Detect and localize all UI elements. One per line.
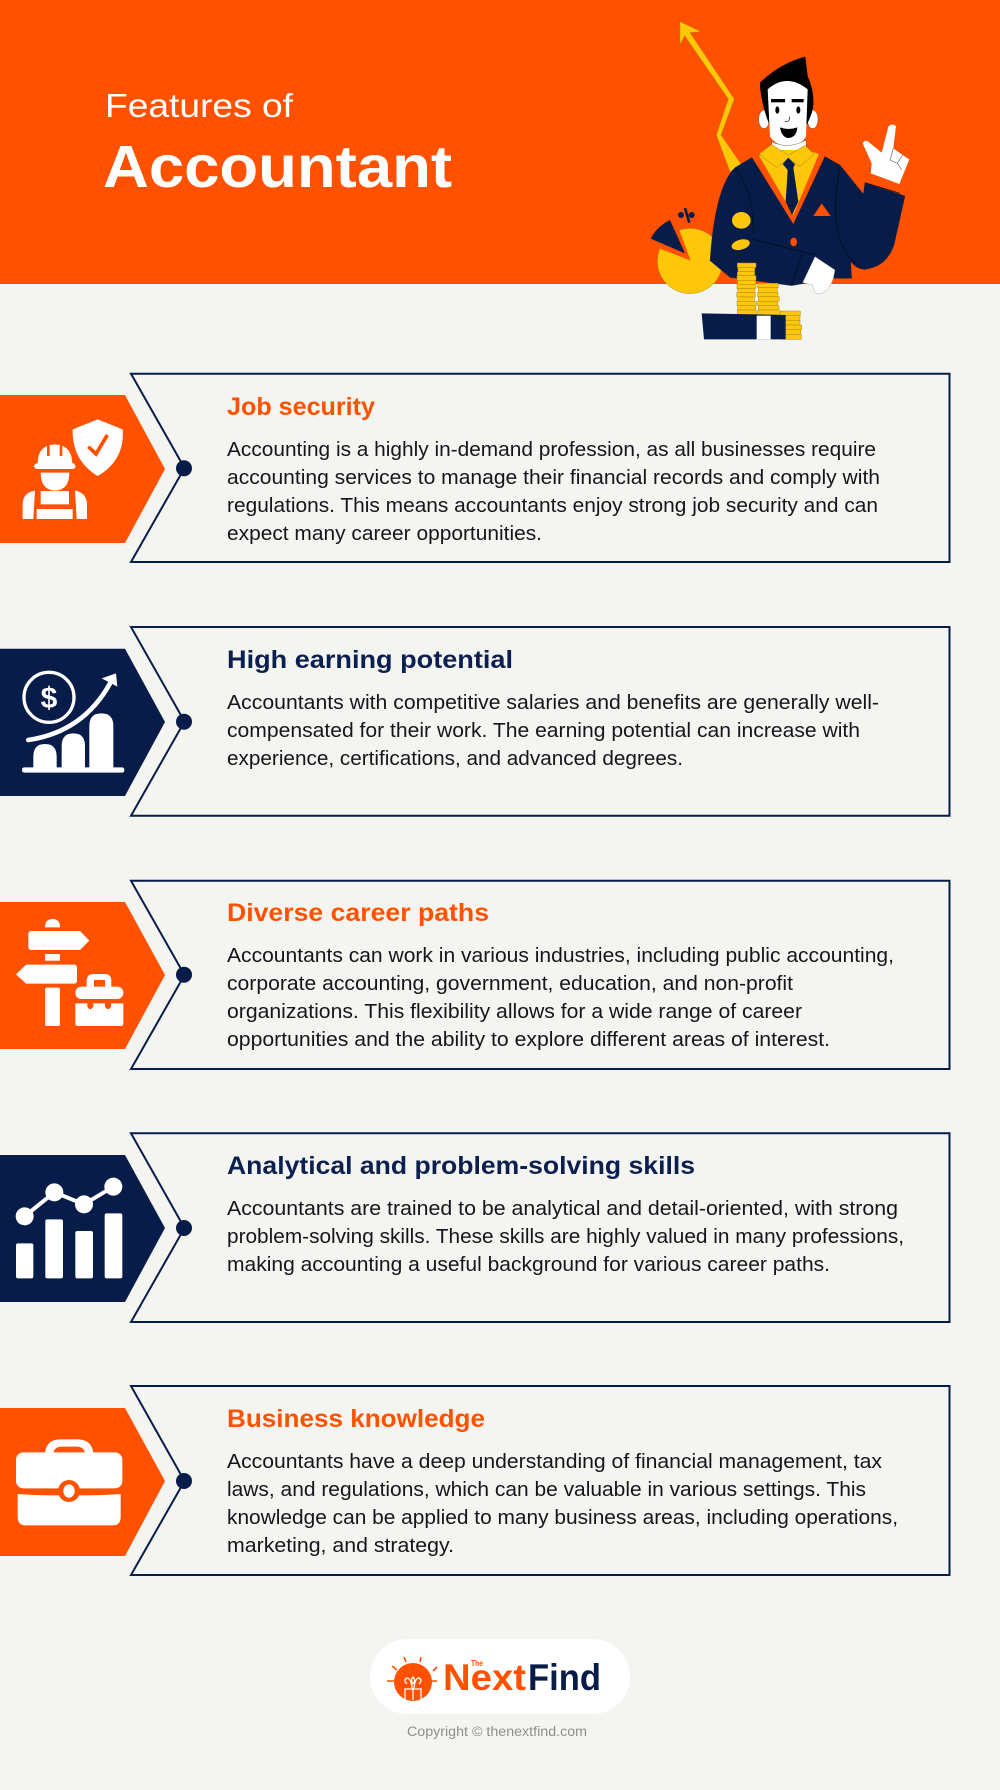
logo: TheNextFind: Next <box>443 1657 526 1698</box>
connector dot <box>176 1473 192 1489</box>
body text: organizations. This flexibility allows for a wide range of career <box>227 1001 802 1023</box>
connector dot <box>176 460 192 476</box>
body text: marketing, and strategy. <box>227 1535 454 1557</box>
body text: experience, certifications, and advanced degrees. <box>227 748 683 770</box>
body text: expect many career opportunities. <box>227 523 542 545</box>
logo: TheNextFind <box>370 1639 630 1714</box>
logo: TheNextFind: The <box>471 1659 483 1668</box>
panel: job security <box>0 374 950 562</box>
heading: Job security <box>227 393 375 421</box>
heading: Business knowledge <box>227 1405 485 1433</box>
title <box>103 87 452 200</box>
body text <box>227 1451 898 1557</box>
title: Accountant <box>103 134 452 200</box>
icon badge: worker and shield <box>0 395 165 543</box>
body text <box>227 1198 904 1276</box>
heading: High earning potential <box>227 646 513 674</box>
connector dot <box>176 714 192 730</box>
panel: high earning potential <box>0 627 950 816</box>
body text: corporate accounting, government, education, and non-profit <box>227 973 793 995</box>
panel: diverse career paths <box>0 881 950 1069</box>
connector dot <box>176 1220 192 1236</box>
icon: coin stacks <box>737 263 802 339</box>
panel: business knowledge <box>0 1386 950 1575</box>
copyright: Copyright © thenextfind.com <box>407 1724 587 1739</box>
body text <box>227 692 879 770</box>
body text: Accounting is a highly in-demand profession, as all businesses require <box>227 439 876 461</box>
panel outline <box>131 881 950 1069</box>
body text: Accountants can work in various industries, including public accounting, <box>227 945 894 967</box>
body text: Accountants with competitive salaries and benefits are generally well- <box>227 692 879 714</box>
icon badge: line and bar chart <box>0 1155 165 1302</box>
body text <box>227 439 880 545</box>
body text: opportunities and the ability to explore different areas of interest. <box>227 1029 830 1051</box>
body text: regulations. This means accountants enjoy strong job security and can <box>227 495 878 517</box>
body text: compensated for their work. The earning potential can increase with <box>227 720 860 742</box>
panel outline <box>131 627 950 816</box>
icon: banknote bundle <box>702 313 786 339</box>
connector dot <box>176 967 192 983</box>
panel outline <box>131 1133 950 1322</box>
body text: accounting services to manage their financial records and comply with <box>227 467 880 489</box>
body text: laws, and regulations, which can be valuable in various settings. This <box>227 1479 866 1501</box>
title: Features of <box>105 87 294 124</box>
header band <box>0 0 1000 284</box>
body text: making accounting a useful background for various career paths. <box>227 1254 830 1276</box>
icon: light bulb <box>387 1657 437 1701</box>
body text <box>227 945 894 1051</box>
icon badge: signpost and briefcase <box>0 902 165 1049</box>
icon badge: dollar and growth chart: $ <box>41 682 58 715</box>
body text: knowledge can be applied to many business areas, including operations, <box>227 1507 898 1529</box>
body text: Accountants are trained to be analytical and detail-oriented, with strong <box>227 1198 898 1220</box>
icon badge: briefcase <box>0 1408 165 1556</box>
icon: rising arrow <box>680 22 742 172</box>
heading: Diverse career paths <box>227 899 489 927</box>
body text: problem-solving skills. These skills are highly valued in many professions, <box>227 1226 904 1248</box>
figure: accountant <box>710 57 909 294</box>
heading: Analytical and problem-solving skills <box>227 1152 695 1180</box>
panel outline <box>131 374 950 562</box>
chart: pie chart <box>651 208 723 294</box>
panel: analytical and problem-solving skills <box>0 1133 950 1322</box>
logo: TheNextFind: Find <box>528 1657 601 1698</box>
icon badge: dollar and growth chart <box>0 649 165 796</box>
body text: Accountants have a deep understanding of financial management, tax <box>227 1451 882 1473</box>
illustration: accountant with arrow, pie chart and coins <box>651 22 909 339</box>
panel outline <box>131 1386 950 1575</box>
